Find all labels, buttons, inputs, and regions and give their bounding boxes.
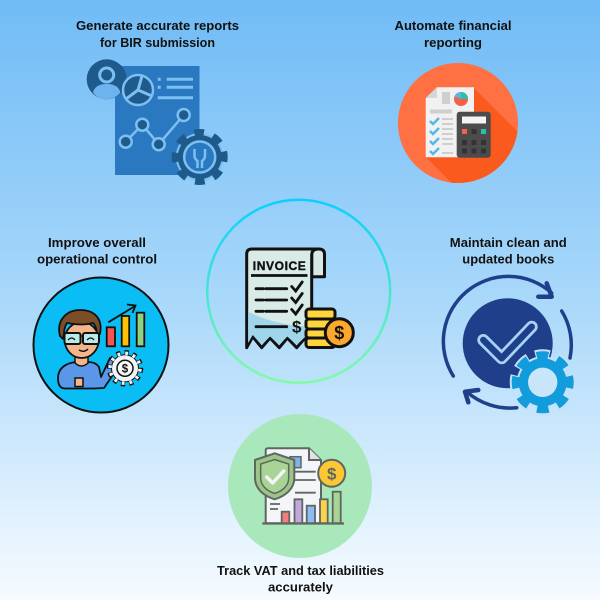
- icon: report with chart and gear: [87, 59, 224, 182]
- heading: track VAT: accurately: [268, 580, 334, 595]
- icon: person with glasses, bars and gear: $: [122, 364, 129, 376]
- heading: generate reports: for BIR submission: [100, 35, 215, 50]
- heading: track VAT: Track VAT and tax liabilities: [217, 563, 384, 578]
- heading: maintain books: Maintain clean and: [450, 235, 567, 250]
- heading: maintain books: [450, 235, 567, 266]
- icon: shield, document, bars on green circle: [228, 414, 372, 558]
- center ring with invoice icon: [207, 200, 390, 383]
- heading: automate reporting: reporting: [424, 35, 482, 50]
- icon: invoice and coins: [247, 249, 353, 348]
- heading: automate reporting: [394, 18, 512, 50]
- icon: invoice and coins: INVOICE: [253, 259, 306, 273]
- heading: track VAT: [217, 563, 384, 595]
- icon: invoice and coins: $: [334, 323, 344, 343]
- icon: person with glasses, bars and gear: [34, 278, 168, 412]
- icon: shield, document, bars on green circle: $: [327, 464, 337, 484]
- icon: orange circle with document and calculator: [398, 63, 518, 183]
- heading: generate reports: [76, 18, 239, 50]
- heading: improve control: operational control: [37, 252, 157, 266]
- heading: improve control: [37, 235, 157, 266]
- icon: invoice and coins: $: [292, 318, 302, 337]
- icon: check mark with gear and cycle arrows: [443, 276, 571, 409]
- heading: automate reporting: Automate financial: [394, 18, 512, 33]
- heading: maintain books: updated books: [462, 252, 554, 266]
- heading: generate reports: Generate accurate reports: [76, 18, 239, 33]
- heading: improve control: Improve overall: [48, 235, 146, 250]
